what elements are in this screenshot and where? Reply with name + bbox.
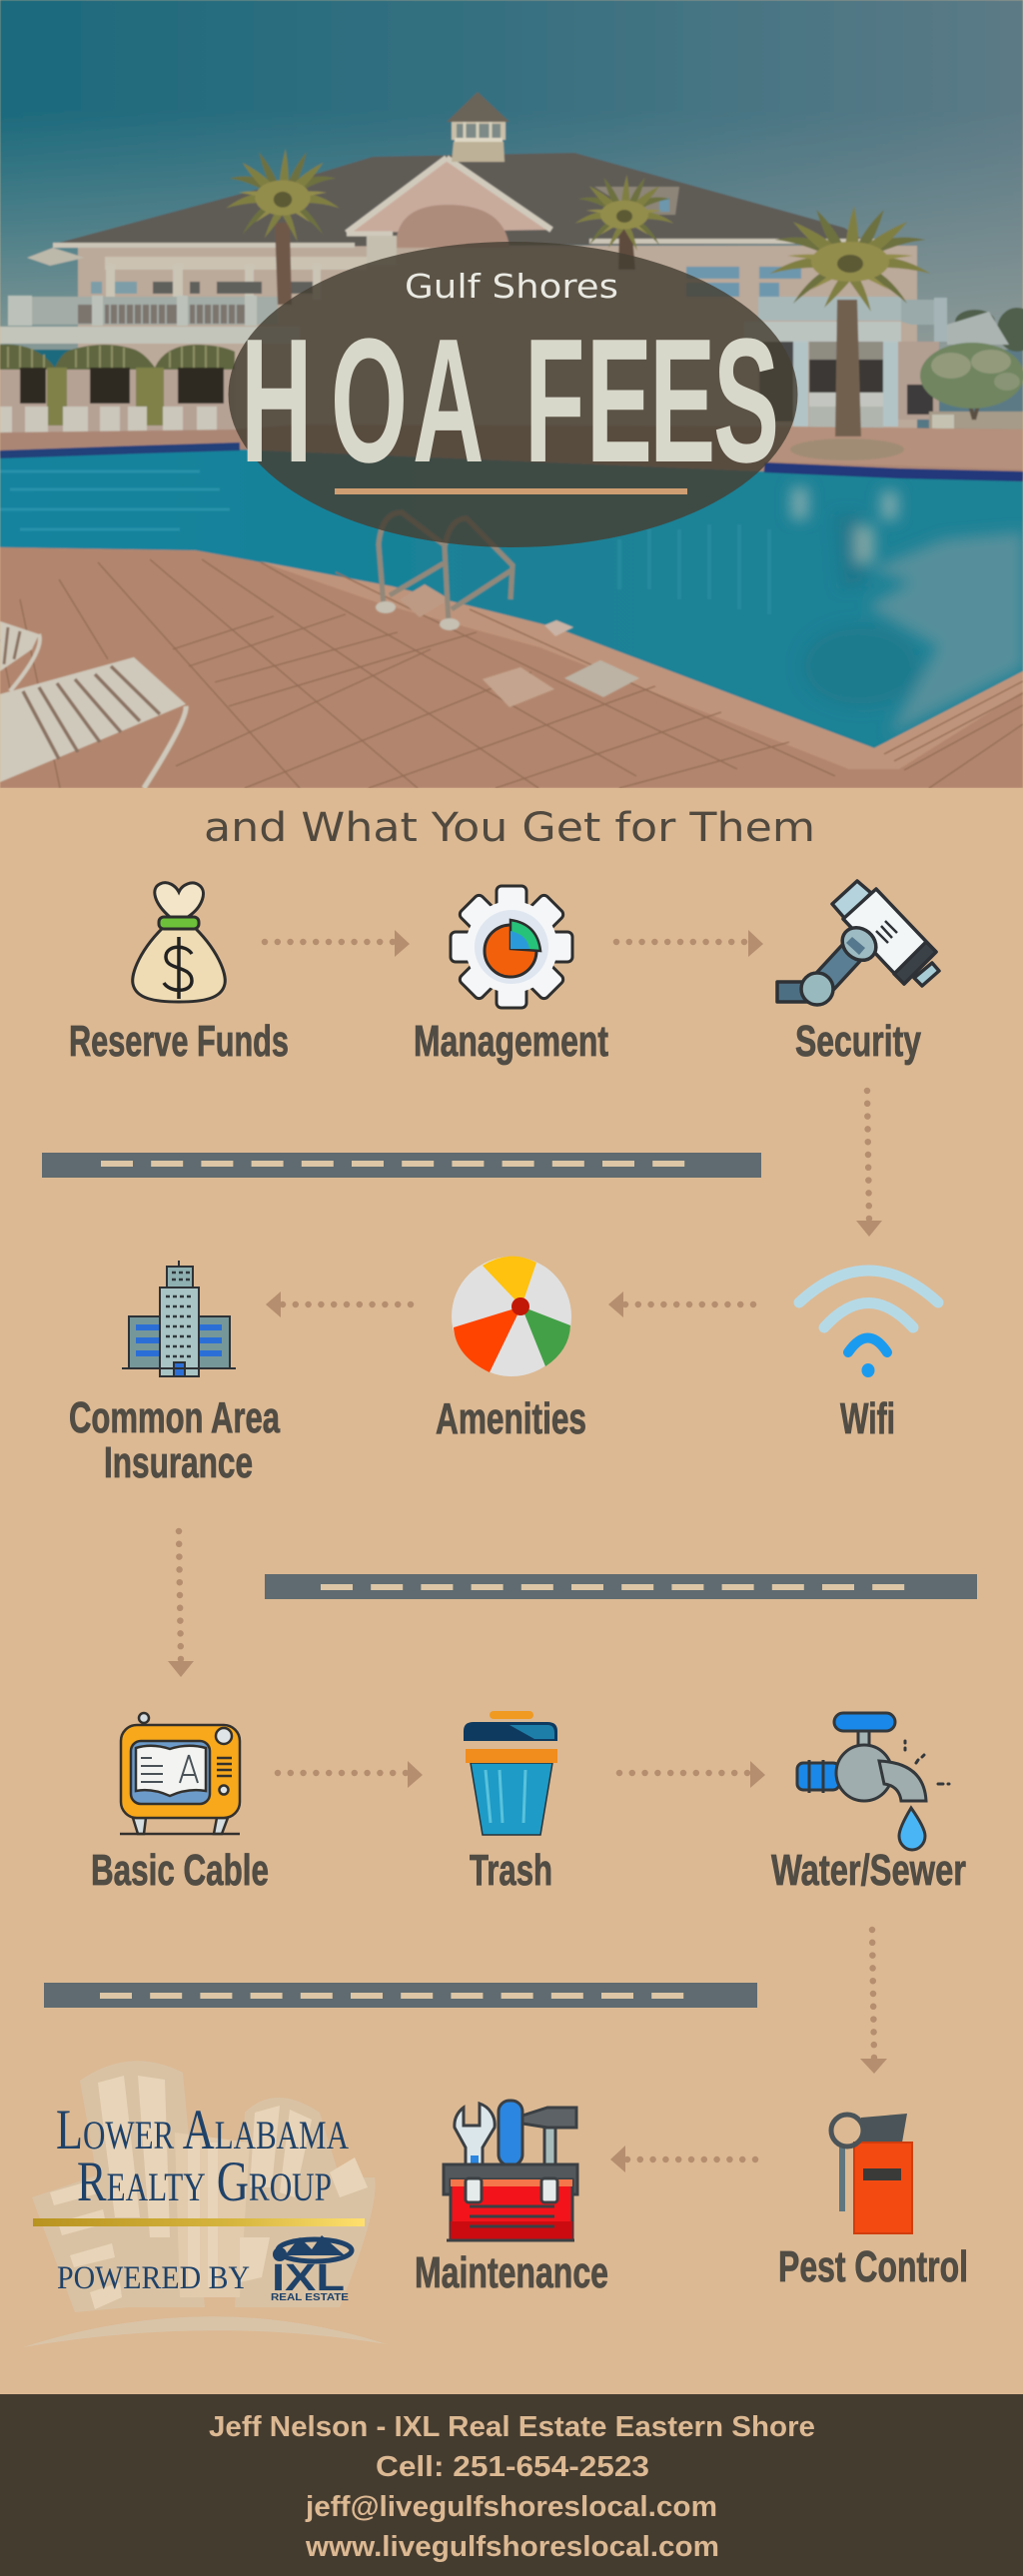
- icon: office building: [122, 1261, 236, 1376]
- logo mark: iXL Real Estate: REAL ESTATE: [271, 2292, 349, 2303]
- step: Basic Cable: [91, 1713, 269, 1895]
- icon: security camera: [777, 881, 939, 1005]
- section subtitle: and What You Get for Them: [204, 805, 815, 851]
- arrow 4: [608, 1291, 753, 1317]
- step: Pest Control: [778, 2114, 968, 2291]
- step: Management: [414, 886, 608, 1066]
- road divider 1: [42, 1153, 761, 1178]
- logo watermark skyline: [23, 2061, 387, 2347]
- icon: money bag: [133, 883, 225, 1002]
- cabanas: [0, 345, 235, 432]
- road divider 3: [44, 1983, 757, 2008]
- bush: [920, 343, 1023, 420]
- footer contact text: [209, 2411, 815, 2563]
- arrow 5: [266, 1291, 411, 1317]
- icon: wifi: [799, 1271, 938, 1377]
- arrow 7: [278, 1761, 423, 1788]
- label: Wifi: Wifi: [840, 1394, 895, 1443]
- footer contact text: jeff@livegulfshoreslocal.com: [305, 2491, 717, 2523]
- icon: pest control canister: [831, 2114, 912, 2233]
- label: Management: Management: [414, 1017, 608, 1066]
- background trees: [955, 308, 1023, 352]
- deck far side: [0, 425, 1023, 481]
- road divider 2: [265, 1574, 977, 1599]
- label: Amenities: Amenities: [436, 1394, 586, 1443]
- label: Common Area Insurance: [69, 1393, 280, 1487]
- title badge ellipse: [228, 242, 797, 547]
- lounge chairs: [0, 621, 186, 788]
- footer band: [0, 2394, 1023, 2576]
- logo mark: iXL Real Estate: IXL: [272, 2257, 345, 2299]
- label: Security: Security: [795, 1017, 921, 1066]
- step: Wifi: [799, 1271, 938, 1443]
- step: Maintenance: [415, 2101, 608, 2297]
- icon: beach ball: [452, 1257, 571, 1376]
- logo text: Lower Alabama: Lower Alabama: [56, 2099, 349, 2161]
- step: Amenities: [436, 1257, 586, 1443]
- label: Trash: Trash: [470, 1846, 552, 1895]
- label: Reserve Funds: Reserve Funds: [69, 1017, 289, 1066]
- icon: gear: [451, 886, 572, 1008]
- pool ladder: [376, 512, 512, 630]
- logo: Lower Alabama Realty Group: [23, 2061, 387, 2347]
- footer contact text: Cell: 251-654-2523: [376, 2451, 649, 2483]
- arrow 2: [616, 930, 763, 957]
- logo text: Powered by: POWERED BY: [57, 2260, 250, 2296]
- label: Maintenance: Maintenance: [415, 2248, 608, 2297]
- label: Basic Cable: Basic Cable: [91, 1846, 269, 1895]
- icon: water faucet: [797, 1713, 949, 1850]
- arrow 1: [265, 930, 410, 957]
- pool deck with tiles: [0, 547, 1023, 788]
- step: Trash: [464, 1711, 557, 1895]
- icon: television: [120, 1713, 240, 1834]
- arrow 9: [860, 1930, 887, 2074]
- building: clubhouse: [0, 153, 1023, 436]
- step: Common Area Insurance: [69, 1261, 280, 1487]
- step: Reserve Funds: [69, 883, 289, 1066]
- arrow 3: [856, 1091, 882, 1237]
- palm trees: [226, 149, 931, 436]
- arrow 8: [619, 1761, 765, 1788]
- hero photo: resort clubhouse and pool: [0, 0, 1023, 788]
- headline underline: [335, 488, 687, 494]
- subtitle: Gulf Shores: Gulf Shores: [405, 267, 618, 306]
- cupola: [447, 92, 510, 162]
- icon: toolbox: [444, 2101, 577, 2240]
- logo mark: iXL Real Estate: [271, 2235, 352, 2303]
- step: Security: [777, 881, 939, 1066]
- logo gold bar: [33, 2218, 365, 2226]
- footer contact text: www.livegulfshoreslocal.com: [305, 2531, 719, 2563]
- icon: trash can: [464, 1711, 557, 1835]
- logo text: Realty Group: Realty Group: [77, 2150, 332, 2213]
- step: Water/Sewer: [771, 1713, 966, 1895]
- label: Common Area Insurance: Common Area: [69, 1393, 280, 1442]
- pool water: [0, 446, 1023, 748]
- arrow 6: [168, 1531, 194, 1677]
- arrow 10: [610, 2146, 755, 2172]
- headline: HOA FEES: HOA FEES: [241, 303, 779, 499]
- footer contact text: Jeff Nelson - IXL Real Estate Eastern Shore: [209, 2411, 815, 2443]
- label: Common Area Insurance: Insurance: [104, 1438, 253, 1487]
